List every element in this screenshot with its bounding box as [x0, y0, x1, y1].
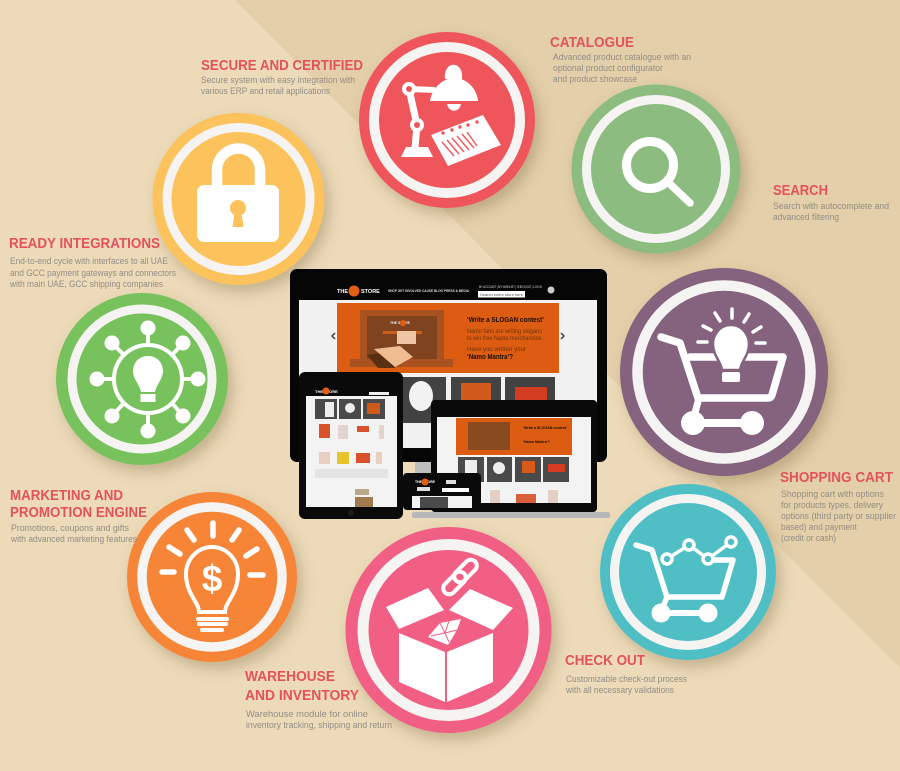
text: check out: with all necessary validations [565, 685, 674, 695]
icon: desk lamp and catalogue [401, 65, 501, 166]
text: marketing and promotion engine: PROMOTION ENGINE [10, 505, 147, 521]
text: search [773, 183, 889, 222]
laptop [412, 400, 610, 518]
circle: marketing and promotion engine [127, 492, 297, 662]
text: catalogue: Advanced product catalogue with an [553, 52, 691, 62]
text: marketing and promotion engine [10, 488, 147, 544]
circle: shopping cart [620, 268, 828, 476]
text: warehouse and inventory: WAREHOUSE [245, 669, 335, 685]
text: warehouse and inventory: AND INVENTORY [245, 688, 359, 704]
text: secure and certified: various ERP and retail applications [201, 86, 330, 96]
monitor: ‘Namo Mantra’? [467, 354, 513, 361]
text: secure and certified: SECURE AND CERTIFIED [201, 58, 363, 74]
product tiles [403, 377, 446, 423]
carousel arrows [332, 333, 564, 339]
text: catalogue [550, 35, 691, 84]
banner [337, 303, 559, 373]
text: ready integrations [9, 236, 176, 289]
phone: THE STORE [415, 480, 436, 484]
text: shopping cart: Shopping cart with options [781, 489, 884, 499]
text: warehouse and inventory: inventory tracking, shipping and return [246, 720, 392, 730]
text: shopping cart [780, 470, 896, 543]
monitor: STORE [361, 289, 380, 295]
monitor [290, 269, 607, 475]
text: ready integrations: with main UAE, GCC shipping companies [9, 279, 163, 289]
circle: catalogue [359, 32, 535, 208]
text: shopping cart: for products types, delivery [781, 500, 883, 510]
device mockups [290, 269, 610, 519]
icon: cart with bulb [661, 309, 783, 435]
laptop: ‘Write a SLOGAN contest’ [523, 426, 567, 430]
monitor: to win free Namo merchandise. [467, 336, 543, 342]
text: shopping cart: based) and payment [781, 522, 857, 532]
text: catalogue: CATALOGUE [550, 35, 634, 51]
text: secure and certified: Secure system with easy integration with [201, 75, 355, 85]
icon: magnifier [626, 142, 690, 203]
text: search: advanced filtering [773, 212, 839, 222]
text: search: Search with autocomplete and [773, 201, 889, 211]
text: check out: Customizable check-out process [566, 674, 687, 684]
circle: secure and certified [152, 113, 324, 285]
text: catalogue: and product showcase [553, 74, 637, 84]
monitor: THE STORE [390, 321, 411, 325]
text: shopping cart: options (third party or supplier [781, 511, 896, 521]
text: ready integrations: End-to-end cycle with interfaces to all UAE [10, 256, 168, 266]
text: warehouse and inventory [245, 669, 392, 730]
icon: dollar bulb [162, 523, 263, 630]
monitor: Have you written your [467, 346, 527, 353]
monitor: ‘Write a SLOGAN contest’ [467, 317, 544, 324]
store logo: THE [337, 289, 348, 295]
monitor: Namo fans are writing slogans [467, 329, 542, 335]
laptop: ‘Namo Mantra’? [523, 440, 550, 444]
text: catalogue: optional product configurator [553, 63, 663, 73]
icon: padlock [197, 148, 279, 242]
text: marketing and promotion engine: with advanced marketing features [10, 534, 137, 544]
text: shopping cart: (credit or cash) [781, 533, 836, 543]
circle: search [572, 84, 740, 254]
monitor: Search entire store here [480, 292, 524, 297]
text: ready integrations: READY INTEGRATIONS [9, 236, 160, 252]
phone [403, 473, 481, 510]
text: shopping cart: SHOPPING CART [780, 470, 893, 486]
dollar sign: $ [202, 558, 223, 599]
text: check out: CHECK OUT [565, 653, 645, 669]
text: search: SEARCH [773, 183, 828, 199]
text: marketing and promotion engine: MARKETING AND [10, 488, 123, 504]
text: secure and certified [201, 58, 363, 96]
monitor: MY ACCOUNT | MY WISHLIST | CHECKOUT | LOG IN [479, 285, 542, 289]
text: ready integrations: and GCC payment gateways and connectors [10, 268, 176, 278]
tablet [299, 372, 403, 519]
nav: SHOP GET INVOLVED CAUSE BLOG PRESS & MEDIA [388, 289, 469, 293]
icon: bulb network [90, 320, 206, 438]
text: check out [565, 653, 687, 695]
icon: cart with graph [636, 537, 736, 622]
circle: check out [600, 484, 776, 660]
circle: ready integrations [56, 293, 228, 465]
tablet: THE STORE [315, 389, 338, 394]
circle: warehouse and inventory [346, 527, 552, 733]
text: marketing and promotion engine: Promotions, coupons and gifts [11, 523, 129, 533]
text: warehouse and inventory: Warehouse module for online [246, 709, 368, 719]
icon: open box with diamond and link [386, 557, 513, 702]
